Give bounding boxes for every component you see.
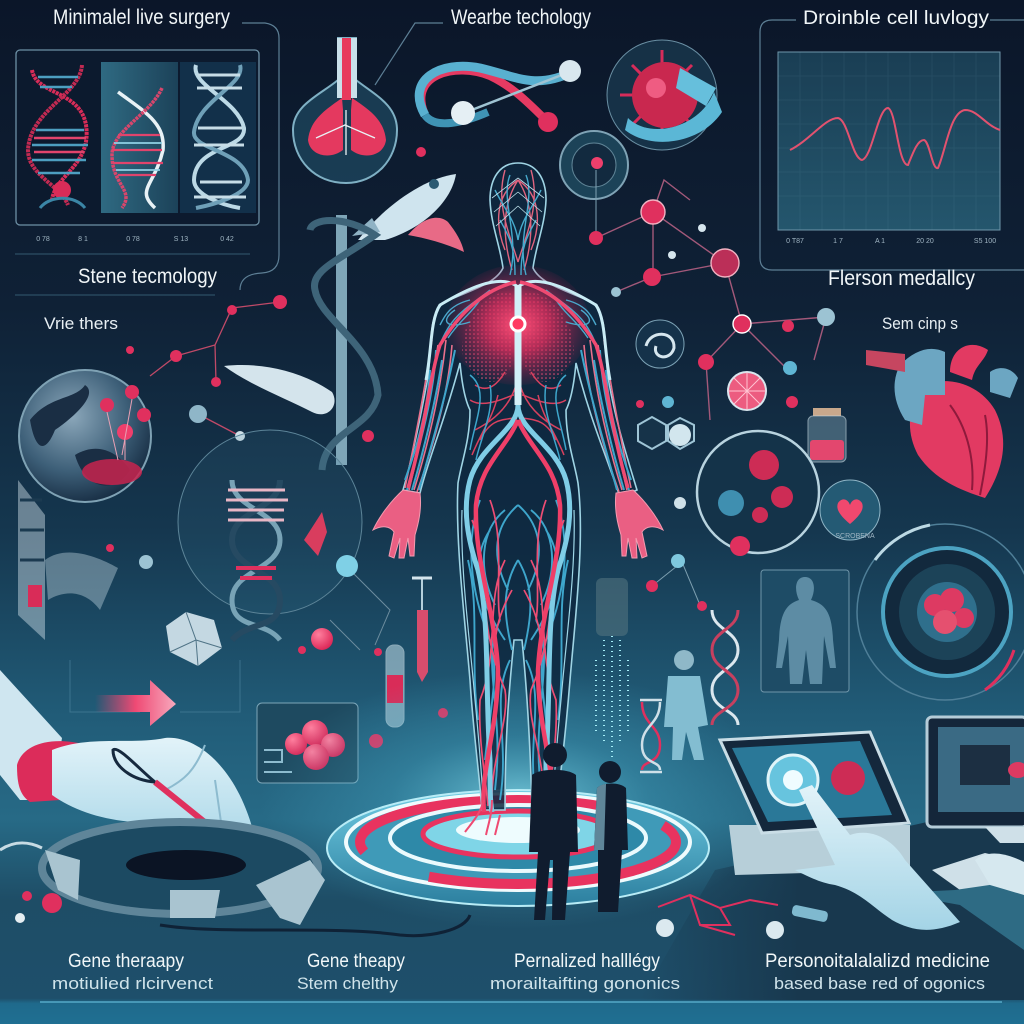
DNA helix: white — [194, 65, 248, 208]
caption 4: based base red of ogonics — [774, 974, 985, 993]
device: tablet — [720, 732, 910, 875]
icon: lungs organ — [293, 38, 397, 183]
axis labels: DNA panel — [15, 236, 250, 295]
chest radial — [446, 265, 590, 385]
icon: test tubes — [298, 578, 448, 748]
icon: scientist — [664, 650, 708, 760]
heart node — [511, 317, 525, 331]
heading: gene technology: Stene tecmology — [78, 265, 217, 288]
arrow panel — [70, 660, 240, 726]
panel: monitor with line chart — [778, 52, 1000, 230]
icon: winged staff with helix — [224, 215, 378, 470]
icon: DNA small — [712, 610, 738, 725]
caption 4: Personoitalalalizd medicine — [765, 951, 990, 972]
arrow — [95, 680, 176, 726]
heading: cell biology: Droinble cell luvlogy — [803, 8, 990, 29]
icon: DNA sphere — [106, 430, 390, 650]
caption 1: motiulied rlcirvenct — [52, 974, 213, 993]
floor glow — [260, 670, 780, 930]
icon: globe with cells — [19, 370, 151, 502]
icon: left ribbon — [18, 480, 118, 640]
icon: swirl lens — [636, 320, 684, 368]
icon: citrus cell — [728, 372, 766, 410]
axis labels: monitor: 20 20 — [916, 238, 934, 245]
device: ring instrument — [0, 822, 470, 936]
fine vessels — [405, 170, 631, 806]
DNA helix: red — [28, 65, 88, 208]
caption 2 — [297, 951, 405, 993]
icon: capsule machine with sparkles — [596, 578, 628, 760]
icon: hourglass helix — [640, 700, 662, 772]
icon: vial — [808, 408, 846, 462]
network: right molecules — [589, 180, 835, 420]
axis labels: monitor — [786, 238, 996, 245]
axis labels: monitor: A 1 — [875, 238, 885, 245]
icon: scanner ring — [835, 524, 1024, 700]
caption 1: Gene theraapy — [68, 951, 184, 972]
heading: wearable technology: Wearbe techology — [451, 6, 591, 29]
hands — [373, 490, 663, 558]
icon: scanner ring: SCROBENA — [835, 533, 875, 540]
DNA helix: mixed — [112, 88, 163, 208]
icon: hexagon molecules — [636, 396, 694, 449]
icon: wearable ribbon — [416, 60, 581, 157]
icon: anatomical heart — [866, 345, 1018, 498]
panel: body scan card — [761, 570, 849, 692]
axis labels: monitor: S5 100 — [974, 238, 996, 245]
axis labels: DNA panel: 0 42 — [220, 236, 234, 243]
icon: gloved hand with scalpel — [0, 670, 253, 857]
panel: DNA comparison — [16, 50, 259, 225]
line chart — [790, 108, 1000, 168]
heading: minimally invasive surgery: Minimalel live surgery — [53, 6, 230, 29]
chest glow — [462, 292, 574, 382]
network: left molecules — [126, 295, 374, 442]
axis labels: DNA panel: 0 78 — [36, 236, 50, 243]
foot flare — [465, 800, 572, 835]
caption 3: morailtaifting gononics — [490, 974, 680, 993]
icon: pointing hand — [795, 785, 1024, 950]
body silhouette — [403, 163, 637, 810]
heading: stem chips: Sem cinp s — [882, 314, 958, 333]
axis labels: monitor: 1 7 — [833, 238, 843, 245]
main vessels — [408, 281, 628, 835]
axis labels: DNA panel: 0 78 — [126, 236, 140, 243]
human figure — [373, 163, 663, 835]
axis labels: DNA panel: S 13 — [174, 236, 188, 243]
heading: virus therapies: Vrie thers — [44, 314, 118, 333]
panel: red cell cluster card — [257, 703, 358, 783]
icon: scope lens — [560, 131, 628, 238]
axis labels: monitor: 0 T87 — [786, 238, 804, 245]
network: small nodes — [646, 554, 707, 611]
icon: petri dish — [674, 431, 819, 556]
platform rings — [327, 790, 709, 906]
axis labels: DNA panel: 8 1 — [78, 236, 88, 243]
bottom captions — [52, 951, 990, 993]
connector: frames — [240, 20, 1024, 290]
footer divider — [40, 1001, 1002, 1003]
heading: personalized medicine: Flerson medallcy — [828, 267, 975, 290]
device: monitor — [927, 717, 1024, 897]
caption 1 — [52, 951, 213, 993]
icon: heart bubble — [820, 480, 880, 540]
icon: virus with ring — [607, 40, 722, 150]
caption 2: Stem chelthy — [297, 974, 399, 993]
silhouettes: two people — [529, 743, 628, 920]
desk surface, right — [640, 800, 1024, 1000]
caption 3: Pernalized halllégy — [514, 951, 660, 972]
icon: spaceship — [352, 174, 464, 252]
caption 2: Gene theapy — [307, 951, 405, 972]
caption 3 — [490, 951, 680, 993]
chemical structure — [656, 895, 829, 939]
caption 4 — [765, 951, 990, 993]
icon: virus capsule — [166, 612, 222, 666]
